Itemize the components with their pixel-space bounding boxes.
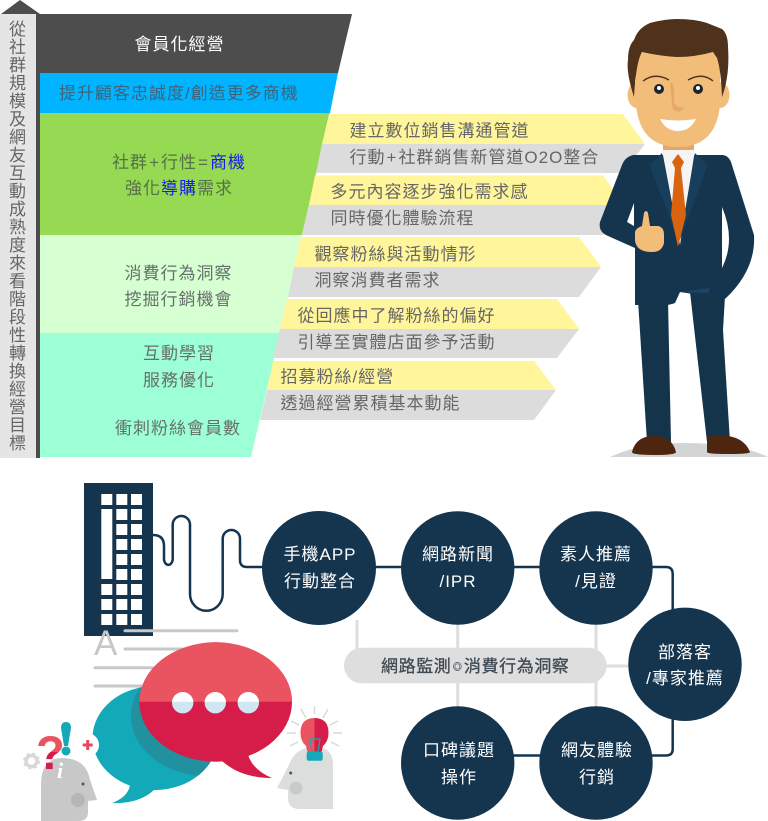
text document lines [94, 624, 237, 686]
axis label: 社 [9, 38, 26, 57]
node: user experience: 網友體驗 [561, 741, 633, 760]
tag band 2: 同時優化體驗流程 [330, 209, 474, 228]
icon: head with question mark: ? [36, 726, 65, 779]
pyramid tier: social plus mobile: 社群+行性=商機 [112, 153, 246, 172]
vertical axis arrow [0, 0, 40, 458]
axis label: 換 [9, 362, 26, 381]
axis label: 群 [9, 56, 26, 75]
node: amateur endorsement: 素人推薦 [560, 545, 632, 564]
tag band 5 [260, 361, 556, 420]
icon: head with light bulb [277, 706, 342, 809]
tag band 1 [316, 114, 645, 173]
pyramid tier: social plus mobile: 強化導購需求 [125, 179, 233, 198]
tag band 5: 透過經營累積基本動能 [280, 394, 460, 413]
pyramid tier: consumer insight: 消費行為洞察 [124, 264, 232, 283]
tag band 4: 引導至實體店面參予活動 [298, 333, 496, 352]
tag band 1: 行動+社群銷售新管道O2O整合 [350, 148, 599, 167]
central pill: monitoring: ◎ [453, 662, 462, 672]
axis label: 看 [9, 272, 26, 291]
tag band 3 [288, 237, 601, 297]
node: mobile app: 手機APP [283, 545, 357, 564]
pyramid tier: membership management: 會員化經營 [134, 35, 224, 54]
node: online news: 網路新聞 [422, 545, 494, 564]
node: bloggers: 部落客 [658, 643, 712, 662]
pyramid tier: social plus mobile [40, 113, 330, 235]
tag band 3: 洞察消費者需求 [314, 271, 440, 290]
pyramid tier: loyalty: 提升顧客忠誠度/創造更多商機 [59, 84, 299, 103]
axis label: 標 [9, 434, 26, 453]
node: user experience [539, 706, 653, 820]
axis label: 動 [9, 182, 26, 201]
node: online news: /IPR [439, 572, 477, 591]
node: bloggers [628, 608, 742, 721]
axis label: 度 [9, 236, 26, 255]
node: word of mouth: 口碑議題 [423, 741, 495, 760]
pyramid tier: consumer insight: 挖掘行銷機會 [124, 290, 232, 309]
pyramid tier: interaction and fans [40, 333, 280, 457]
node: online news [401, 511, 514, 625]
node: amateur endorsement: /見證 [575, 572, 617, 591]
icon: head with question mark [24, 722, 97, 821]
network links [319, 567, 673, 756]
tag band 3: 觀察粉絲與活動情形 [314, 245, 476, 264]
axis label: 友 [9, 146, 26, 165]
node: mobile app [262, 511, 376, 625]
pyramid tier: loyalty [40, 73, 338, 113]
central pill: monitoring: 網路監測 [381, 657, 451, 676]
pyramid tier: interaction and fans: 衝刺粉絲會員數 [115, 419, 241, 438]
axis label: 來 [9, 254, 26, 273]
axis label: 目 [9, 416, 26, 435]
tag band 4: 從回應中了解粉絲的偏好 [298, 306, 496, 326]
node: user experience: 行銷 [579, 768, 615, 787]
tag band 4 [273, 299, 579, 358]
axis label: 營 [9, 398, 26, 417]
text document lines: A [94, 624, 118, 663]
tag band 2 [302, 176, 625, 235]
node: amateur endorsement [539, 511, 653, 625]
axis label: 互 [9, 164, 26, 183]
axis label: 成 [9, 200, 26, 219]
axis label: 段 [9, 308, 26, 327]
pyramid tier: membership management [40, 14, 352, 73]
central pill: monitoring [344, 648, 607, 683]
tag band 1: 建立數位銷售溝通管道 [350, 122, 530, 140]
axis label: 轉 [9, 344, 26, 363]
icon: head with question mark: i [57, 758, 64, 783]
illustration: businessman [600, 19, 768, 457]
node: word of mouth [401, 706, 514, 820]
node: mobile app: 行動整合 [284, 572, 356, 591]
node: word of mouth: 操作 [441, 768, 477, 787]
node: bloggers: /專家推薦 [646, 669, 724, 688]
axis label: 網 [9, 128, 26, 147]
pyramid tier: interaction and fans: 互動學習 [143, 344, 215, 363]
axis label: 性 [9, 326, 26, 345]
icon: keyboard tower [84, 483, 153, 636]
tag band 2: 多元內容逐步強化需求感 [330, 182, 528, 202]
icon: speech bubbles [75, 642, 292, 803]
tag band 5: 招募粉絲/經營 [280, 368, 394, 386]
axis label: 熟 [9, 217, 26, 237]
axis label: 階 [9, 290, 26, 309]
pyramid tier: consumer insight [40, 235, 302, 333]
pyramid tier: interaction and fans: 服務優化 [143, 371, 215, 390]
central pill: monitoring: 消費行為洞察 [464, 657, 570, 676]
axis label: 模 [9, 92, 26, 111]
axis label: 經 [9, 380, 26, 399]
axis label: 規 [9, 74, 26, 93]
connector: cable to first circle [153, 516, 265, 611]
axis label: 從 [9, 20, 26, 39]
axis label: 及 [9, 110, 26, 129]
